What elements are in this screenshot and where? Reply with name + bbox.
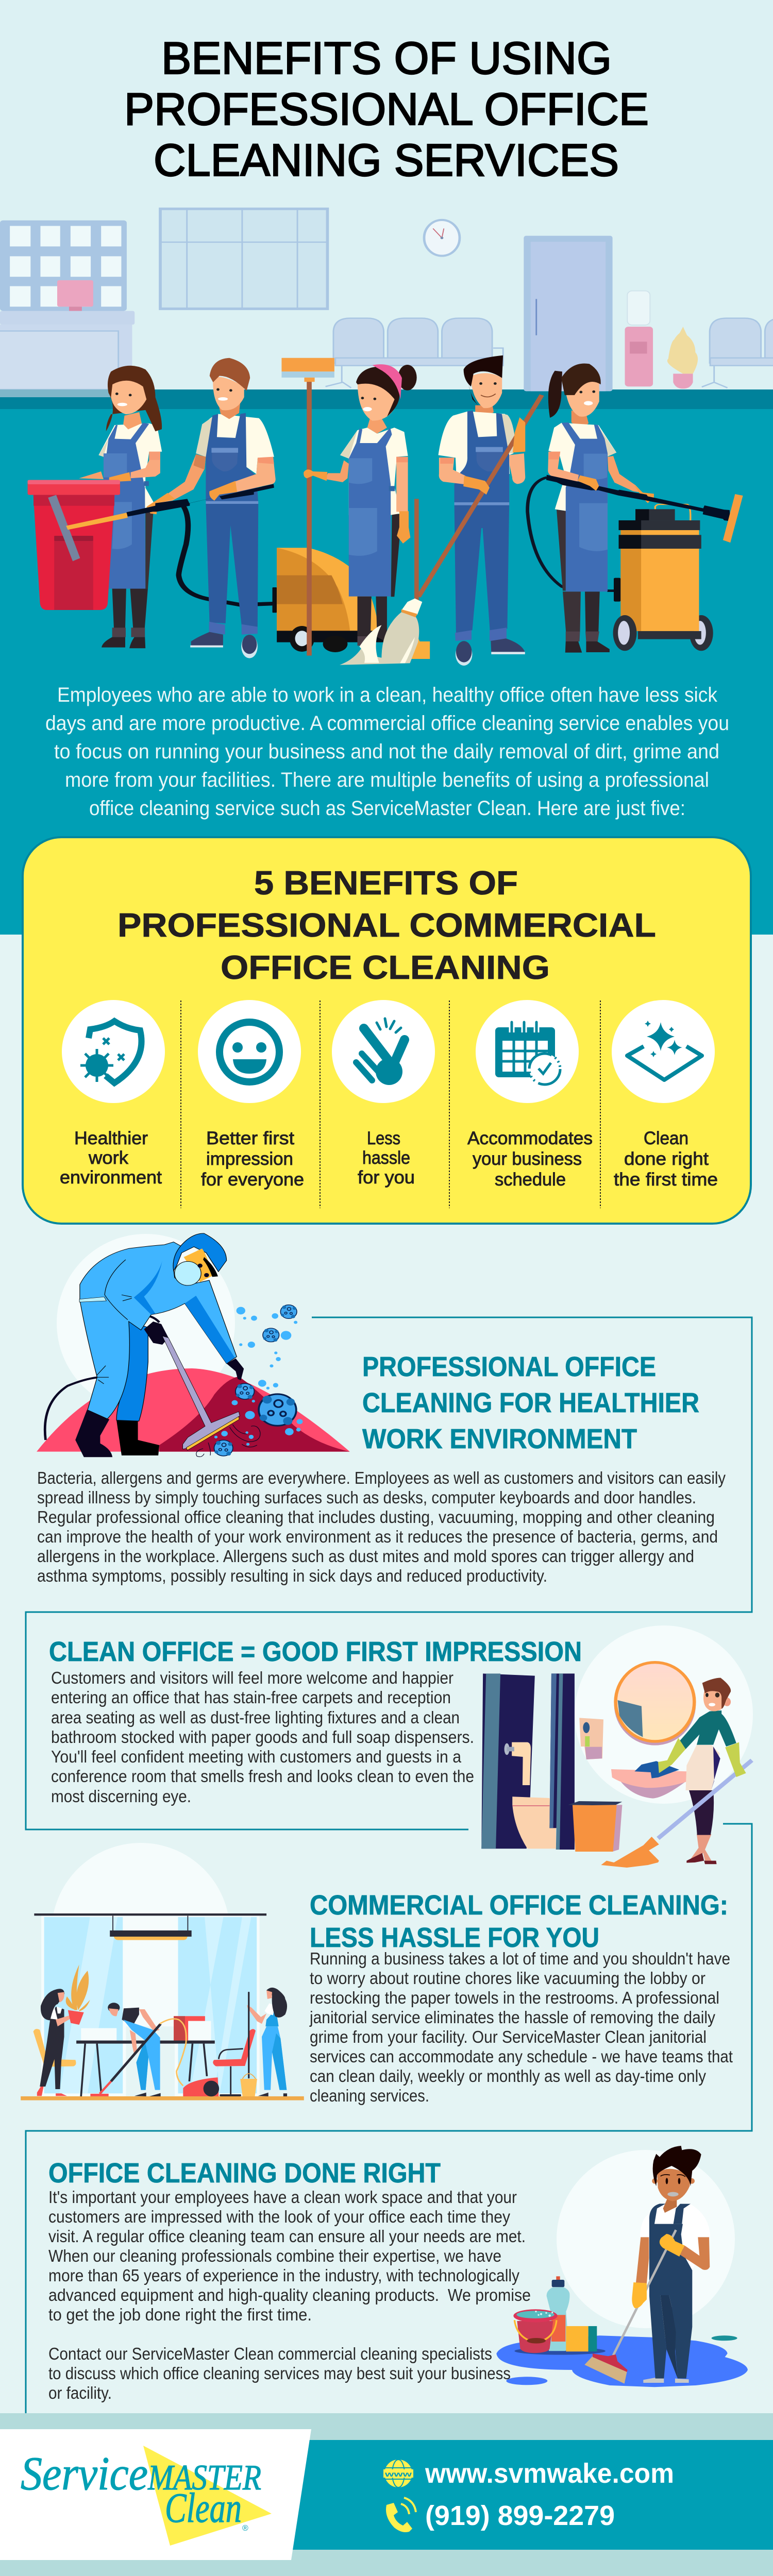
red chair, mop and woman <box>213 1988 287 2096</box>
heads of the team <box>106 355 601 431</box>
section 1 heading: WORK ENVIRONMENT <box>362 1423 637 1454</box>
benefit: clean done right: the first time <box>614 1170 718 1190</box>
section 2 heading: CLEAN OFFICE = GOOD FIRST IMPRESSION <box>49 1636 582 1667</box>
section 4 body text: When our cleaning professionals combine their expertise, we have <box>48 2246 501 2265</box>
man 2 <box>147 402 276 658</box>
cleaning team illustration <box>28 355 743 666</box>
woman 5 <box>528 411 643 653</box>
window and lamp <box>21 1913 304 2100</box>
section 4 heading: OFFICE CLEANING DONE RIGHT <box>48 2158 441 2189</box>
intro paragraph: to focus on running your business and not the daily removal of dirt, grime and <box>54 740 719 763</box>
section 3 heading: COMMERCIAL OFFICE CLEANING: <box>310 1890 728 1921</box>
soap dispenser <box>579 1718 603 1759</box>
section 3 body text <box>309 1949 733 2105</box>
website: www.svmwake.com <box>425 2458 674 2489</box>
section 4 body text: It's important your employees have a clean work space and that your <box>48 2188 517 2207</box>
section 1 body text: can improve the health of your work environment as it reduces the presence of bacteria, germs, and <box>37 1527 718 1546</box>
squeegee <box>162 1336 240 1450</box>
cleaning bottle, sponge and bucket <box>513 2276 597 2353</box>
title: CLEANING SERVICES <box>154 134 619 185</box>
logo panel: Service <box>21 2447 148 2500</box>
benefit: accommodates your schedule <box>467 1000 593 1190</box>
benefit: accommodates your schedule: schedule <box>495 1170 566 1190</box>
reception desk <box>0 280 135 397</box>
man with broom <box>584 2146 710 2384</box>
illustration: disinfecting worker <box>37 1233 350 1457</box>
worker figure <box>45 1233 244 1457</box>
section 2 body text: most discerning eye. <box>51 1787 191 1806</box>
benefit: clean done right: done right <box>624 1149 709 1169</box>
benefit: better first impression: Better first <box>206 1128 294 1148</box>
cart, hoses and bin <box>28 402 387 658</box>
intro paragraph: days and are more productive. A commercial office cleaning service enables you <box>45 712 729 735</box>
benefit: clean done right: Clean <box>644 1128 688 1148</box>
woman 3 body <box>304 419 410 646</box>
office background <box>0 209 773 397</box>
benefit: less hassle: hassle <box>362 1148 410 1168</box>
icon: phone <box>386 2498 416 2532</box>
door <box>524 236 613 391</box>
section 3 body text: services can accommodate any schedule - we have teams that <box>310 2047 733 2066</box>
section 3 body text: cleaning services. <box>310 2086 429 2105</box>
section 1 body text: Regular professional office cleaning that includes dusting, vacuuming, mopping and other cleaning <box>37 1507 715 1527</box>
section 3 body text: restocking the paper towels in the restrooms. A professional <box>310 1988 719 2007</box>
round mirror <box>614 1661 696 1745</box>
icon: smiley <box>220 1022 279 1082</box>
section 3 body text: Running a business takes a lot of time and you shouldn't have <box>310 1949 730 1968</box>
section 1 body text: asthma symptoms, possibly resulting in sick days and reduced productivity. <box>37 1566 547 1585</box>
illustration: restroom cleaner <box>481 1625 753 1868</box>
benefit: accommodates your schedule: your business <box>473 1149 582 1169</box>
icon: globe <box>383 2460 413 2487</box>
icon: calendar and clock <box>495 1022 560 1084</box>
icon: sparkling floor <box>627 1021 702 1080</box>
section 2 body text: bathroom stocked with paper goods and full soap dispensers. <box>51 1727 474 1747</box>
section frame lines <box>26 1317 752 2413</box>
orange waste bin <box>568 1801 622 1852</box>
panel heading: 5 BENEFITS OF <box>254 864 518 902</box>
section 3 body text: grime from your facility. Our ServiceMaster Clean janitorial <box>310 2027 707 2046</box>
panel heading: PROFESSIONAL COMMERCIAL <box>117 906 656 944</box>
section 2 body text <box>51 1668 474 1806</box>
section 4 body text: to get the job done right the first time. <box>48 2305 312 2324</box>
wall grid shelf <box>0 221 127 311</box>
woman 3 head <box>356 364 417 421</box>
illustration: office cleaning crew <box>21 1843 304 2100</box>
viruses and droplets <box>196 1305 303 1457</box>
vacuum cart <box>273 548 387 652</box>
section 2 body text: conference room that smells fresh and looks clean to even the <box>51 1767 474 1786</box>
waiting chairs <box>326 318 773 388</box>
panel: 5 benefits <box>23 837 751 1224</box>
window <box>160 209 327 309</box>
hose <box>179 506 274 605</box>
woman 5 head <box>548 363 601 418</box>
icon: snapping fingers <box>356 1019 405 1085</box>
benefit: healthier work environment: Healthier <box>74 1128 148 1148</box>
man vacuuming <box>90 2003 219 2096</box>
section 3 heading <box>310 1890 728 1953</box>
section 1 heading <box>362 1351 699 1454</box>
man 4 head <box>464 355 503 408</box>
panel heading: OFFICE CLEANING <box>221 948 550 986</box>
benefit: better first impression: impression <box>206 1149 293 1169</box>
section 4 body text: Contact our ServiceMaster Clean commercial cleaning specialists <box>48 2344 492 2363</box>
intro paragraph: more from your facilities. There are multiple benefits of using a professional <box>65 769 709 791</box>
vacuum wand <box>66 481 274 530</box>
section 3 body text: can clean daily, weekly or monthly as well as day-time only <box>310 2066 706 2086</box>
section 4 body text: customers are impressed with the look of your office each time they <box>48 2207 510 2226</box>
intro paragraph: office cleaning service such as ServiceMaster Clean. Here are just five: <box>89 797 685 820</box>
section 2 body text: entering an office that has stain-free carpets and reception <box>51 1688 451 1707</box>
section 2 body text: area seating as well as dust-free lighting fixtures and a clean <box>51 1708 460 1727</box>
icon: shield and virus <box>80 1021 142 1083</box>
section 3 body text: janitorial service eliminates the hassle of removing the daily <box>309 2008 715 2027</box>
section 1 body text <box>37 1468 726 1585</box>
intro paragraph: Employees who are able to work in a clean, healthy office often have less sick <box>57 684 718 706</box>
phone number: (919) 899-2279 <box>425 2500 615 2531</box>
section 4 body text: or facility. <box>48 2383 112 2402</box>
restroom stall and toilet <box>481 1673 575 1850</box>
title: BENEFITS OF USING <box>161 32 612 83</box>
logo panel <box>0 2429 311 2560</box>
section 4 body text: visit. A regular office cleaning team can ensure all your needs are met. <box>48 2227 526 2246</box>
mop <box>340 499 430 665</box>
section 3 body text: to worry about routine chores like vacuuming the lobby or <box>310 1969 705 1988</box>
wand 5 <box>546 475 743 543</box>
panel heading <box>117 864 656 986</box>
water puddle <box>496 2335 748 2387</box>
man 4, woman 5, mop and vacuum <box>340 395 743 666</box>
man 4 <box>418 395 542 666</box>
benefit: better first impression: for everyone <box>201 1170 304 1190</box>
illustration: man sweeping <box>496 2146 748 2387</box>
red mound <box>37 1368 350 1452</box>
section 2 body text: Customers and visitors will feel more welcome and happier <box>51 1668 453 1687</box>
red bin and woman 1 <box>28 412 162 648</box>
logo panel: MASTER <box>147 2458 261 2498</box>
logo panel: Clean <box>165 2484 242 2531</box>
title: PROFESSIONAL OFFICE <box>124 83 649 134</box>
section 4 body text: to discuss which office cleaning services may best suit your business <box>48 2364 511 2383</box>
title <box>124 32 649 185</box>
benefit: healthier work environment <box>60 1000 165 1188</box>
potted plant <box>667 327 698 388</box>
mop and woman <box>601 1678 752 1868</box>
table and boxes <box>76 2016 215 2096</box>
water cooler <box>625 291 653 386</box>
footer <box>0 2413 773 2576</box>
logo panel: ® <box>242 2524 248 2533</box>
sink <box>611 1761 686 1799</box>
section 1 body text: allergens in the workplace. Allergens such as dust mites and mold spores can trigger allergy and <box>37 1547 694 1566</box>
section 1 heading: PROFESSIONAL OFFICE <box>362 1351 656 1382</box>
vacuum canister <box>613 504 713 651</box>
wall clock <box>424 220 460 256</box>
benefit: less hassle: for you <box>358 1167 415 1188</box>
section 1 heading: CLEANING FOR HEALTHIER <box>362 1387 699 1418</box>
section 4 body text: advanced equipment and high-quality cleaning products. We promise <box>48 2285 531 2304</box>
section 1 body text: spread illness by simply touching surfaces such as desks, computer keyboards and door handles. <box>37 1488 696 1507</box>
benefit: less hassle: Less <box>367 1128 400 1148</box>
broom with woman 3 <box>281 358 334 656</box>
section 4 body text <box>48 2188 531 2402</box>
benefit: healthier work environment: work <box>88 1148 129 1168</box>
benefit: clean done right <box>612 1000 718 1190</box>
intro paragraph <box>45 684 729 820</box>
man 2 head <box>210 358 250 410</box>
benefit: healthier work environment: environment <box>60 1167 162 1188</box>
section 3 heading: LESS HASSLE FOR YOU <box>310 1922 599 1953</box>
benefit: accommodates your schedule: Accommodates <box>467 1128 593 1148</box>
section 4 body text: more than 65 years of experience in the industry, with technologically <box>48 2266 519 2285</box>
benefit: better first impression <box>198 1000 304 1190</box>
icon: globe: www <box>384 2470 412 2478</box>
woman with plant <box>33 1964 90 2096</box>
benefit: less hassle <box>332 1000 435 1188</box>
woman 1 head <box>106 366 162 431</box>
section 2 body text: You'll feel confident meeting with customers and guests in a <box>51 1747 462 1766</box>
